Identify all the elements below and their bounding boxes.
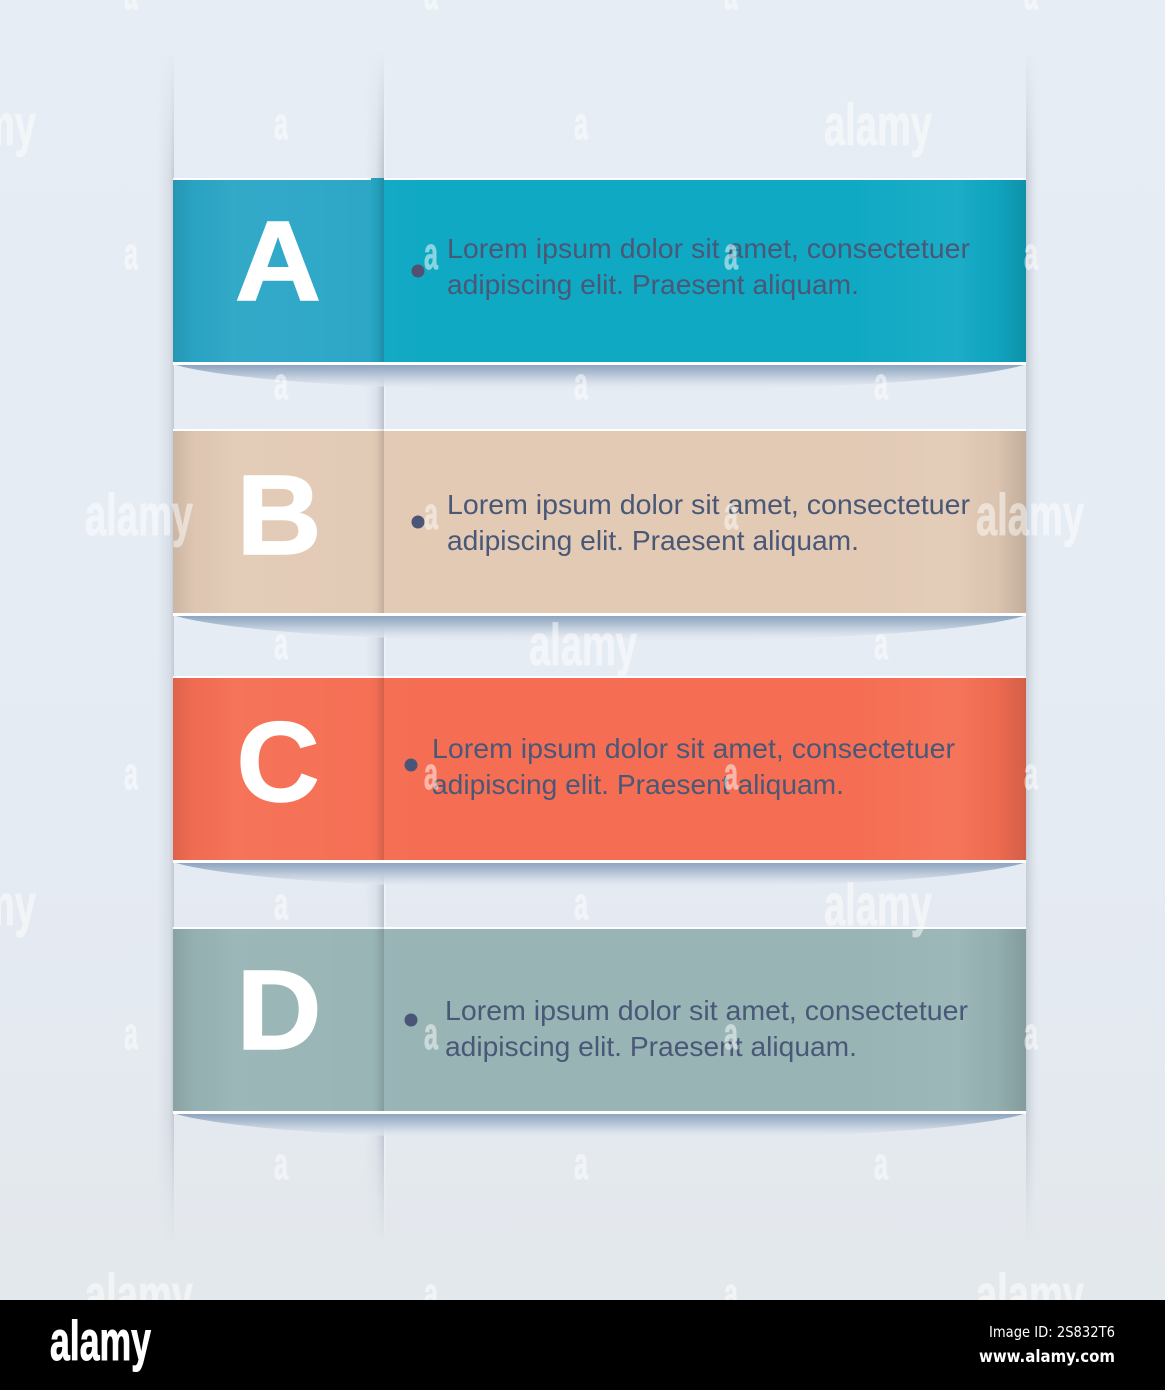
text block: Lorem ipsum dolor sit amet, consectetuer [432, 733, 955, 764]
watermark: alamy [85, 483, 193, 548]
watermark: alamy [529, 613, 637, 678]
watermark: a [724, 748, 739, 799]
text block: adipiscing elit. Praesent aliquam. [432, 769, 844, 800]
watermark: alamy [85, 1263, 193, 1328]
watermark: a [424, 1008, 439, 1059]
bullet [404, 1014, 418, 1026]
watermark: a [424, 748, 439, 799]
footer bar [0, 1300, 1165, 1390]
text block: Lorem ipsum dolor sit amet, consectetuer [447, 233, 970, 264]
watermark: a [574, 1138, 589, 1189]
watermark: a [274, 618, 289, 669]
watermark: a [1024, 748, 1039, 799]
watermark: a [124, 1008, 139, 1059]
text block: adipiscing elit. Praesent aliquam. [447, 269, 859, 300]
bullet [412, 264, 424, 278]
watermark: a [574, 878, 589, 929]
vertical paper folds [158, 50, 1040, 1245]
letter B: B [236, 452, 322, 578]
watermark: a [574, 358, 589, 409]
watermark: a [274, 1138, 289, 1189]
footer logo: alamy [50, 1309, 151, 1372]
watermark: a [124, 748, 139, 799]
watermark: a [1024, 1008, 1039, 1059]
watermark: a [1024, 228, 1039, 279]
watermark: a [574, 98, 589, 149]
watermark: a [274, 878, 289, 929]
text block: Lorem ipsum dolor sit amet, consectetuer [445, 995, 968, 1026]
panel: ribbon D [173, 927, 1026, 1140]
panel: ribbon C [173, 676, 1026, 889]
watermark: a [874, 358, 889, 409]
bullet [412, 516, 424, 528]
watermark: a [874, 1138, 889, 1189]
text block: adipiscing elit. Praesent aliquam. [445, 1031, 857, 1062]
watermark: a [874, 618, 889, 669]
letter A: A [235, 198, 321, 324]
letter D: D [236, 947, 322, 1073]
watermark: a [724, 228, 739, 279]
watermark: a [424, 228, 439, 279]
bullet [404, 758, 418, 772]
watermark: alamy [976, 1263, 1084, 1328]
watermark: a [124, 228, 139, 279]
text block: adipiscing elit. Praesent aliquam. [447, 525, 859, 556]
panel: ribbon B [173, 429, 1026, 642]
website: www.alamy.com [979, 1347, 1115, 1367]
watermark: a [724, 488, 739, 539]
watermark: a [424, 488, 439, 539]
image id: Image ID: 2S832T6 [989, 1323, 1115, 1341]
watermark: a [274, 98, 289, 149]
watermark: a [724, 1008, 739, 1059]
watermark: a [724, 1268, 739, 1319]
letter C: C [236, 699, 320, 825]
watermark: alamy [824, 93, 932, 158]
panel: ribbon A [173, 178, 1026, 391]
watermark: a [274, 358, 289, 409]
watermark: alamy [824, 873, 932, 938]
watermark: alamy [976, 483, 1084, 548]
text block: Lorem ipsum dolor sit amet, consectetuer [447, 489, 970, 520]
watermark: a [424, 1268, 439, 1319]
